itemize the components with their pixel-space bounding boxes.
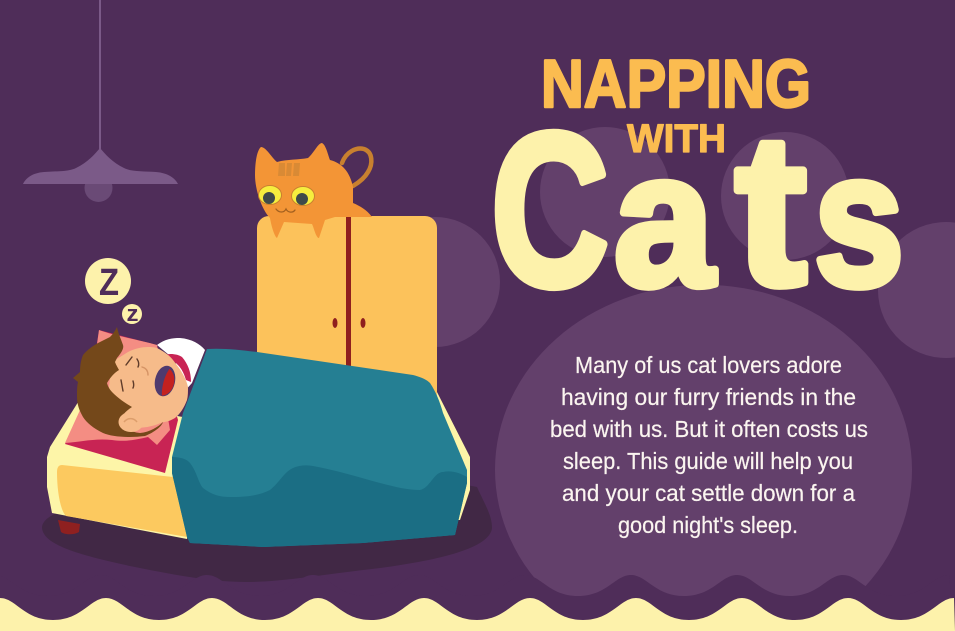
floor shadow [42,480,492,582]
title: Cats: t [735,89,807,330]
title: Cats: C [491,89,609,332]
shirt [157,338,205,393]
collar [163,354,191,382]
mattress [47,392,470,539]
cat [255,143,372,238]
face details [121,357,148,391]
cat eyes [258,186,314,206]
title: Cats: a [614,114,715,326]
purple wave mask [0,575,955,631]
cat stripes [278,163,300,176]
ceiling lamp [23,0,178,202]
intro text: sleep. This guide will help you [563,448,853,474]
snore bubbles: z [126,301,138,326]
head [108,347,188,428]
snore bubbles [85,258,142,326]
intro text: having our furry friends in the [561,384,856,410]
title: Cats: s [814,114,904,326]
bed leg [58,520,80,534]
cat tail [342,149,371,186]
wardrobe [257,216,437,406]
intro text: bed with us. But it often costs us [550,416,868,442]
sleeping man [73,327,205,437]
cat body [255,143,372,238]
intro text: good night's sleep. [618,512,798,538]
title: NAPPING: NAPPING [541,46,811,122]
bed [47,392,470,539]
blanket fold shadow [172,457,467,547]
intro text [550,352,868,538]
background circles [370,127,955,600]
bed base [57,465,187,537]
open mouth [152,364,178,398]
blanket [172,349,467,547]
title: Cats [491,89,904,332]
snore bubbles: Z [99,262,119,304]
title: WITH: WITH [627,117,726,161]
intro text: Many of us cat lovers adore [575,352,842,378]
cat mouth [276,209,295,212]
pillow [65,330,178,473]
intro text: and your cat settle down for a [562,480,855,506]
hair [73,327,163,437]
cream wave footer [0,598,955,631]
ear [118,412,144,432]
